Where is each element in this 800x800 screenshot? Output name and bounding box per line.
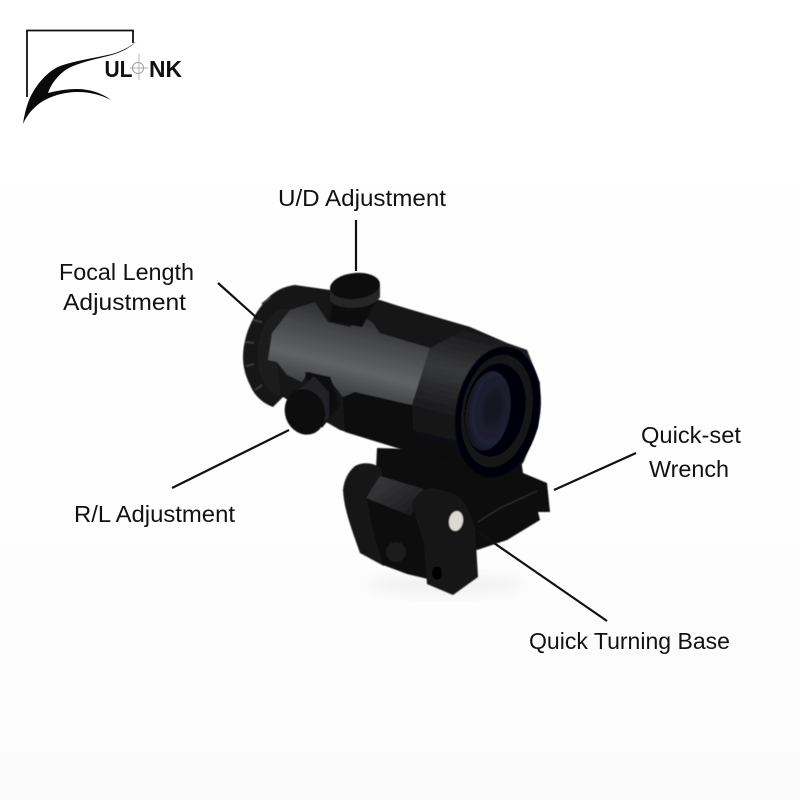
quick turning base: [343, 448, 550, 595]
logo wordmark: NK: [149, 56, 182, 82]
ground shadow: [365, 575, 525, 595]
logo wordmark: [104, 54, 182, 82]
side knob: R/L adjustment: [278, 372, 340, 440]
logo wordmark: UL: [104, 56, 132, 82]
rear ring band: [258, 309, 290, 397]
knob top: [329, 270, 381, 302]
callout: Quick-set Wrench: [554, 422, 742, 490]
logo frame: [27, 30, 133, 97]
callout: Quick-set Wrench: Wrench: [649, 456, 729, 482]
gray body panel: [268, 302, 430, 405]
rail highlight: [478, 491, 537, 522]
inner barrel: [457, 359, 533, 461]
base neck and rail: [375, 448, 550, 550]
scope body: [243, 285, 540, 477]
outer ring: [445, 340, 551, 484]
callout: U/D Adjustment: U/D Adjustment: [278, 185, 447, 211]
locking screw: [386, 542, 406, 562]
top flat facet: [373, 302, 470, 348]
knob side: [330, 284, 380, 308]
knob face: [278, 384, 332, 440]
knob stem: [330, 298, 378, 327]
front barrel: [412, 327, 540, 477]
callout: Focal Length Adjustment: [59, 259, 257, 318]
objective lens: [445, 340, 551, 484]
callout: R/L Adjustment: R/L Adjustment: [74, 501, 236, 527]
top plate: [366, 476, 424, 516]
lower facet: [343, 392, 414, 453]
inner ring: [453, 349, 541, 473]
callout: Focal Length Adjustment: Adjustment: [63, 289, 187, 315]
right block: [412, 488, 478, 595]
callout: Quick Turning Base: Quick Turning Base: [529, 628, 730, 654]
body silhouette: [243, 285, 540, 477]
glass: [459, 368, 517, 454]
callout: Focal Length Adjustment: Focal Length: [59, 259, 194, 285]
callout: R/L Adjustment: [74, 430, 289, 527]
rear ring knurling: [245, 297, 271, 390]
magnet: [447, 510, 465, 532]
left block: [343, 463, 385, 566]
middle lower section: [366, 495, 432, 580]
knob side: [294, 376, 329, 434]
logo: Ulink: [23, 30, 182, 124]
logo swoosh: [23, 41, 137, 124]
callout: Quick-set Wrench: Quick-set: [641, 422, 742, 448]
callout: Quick Turning Base: [478, 532, 730, 654]
screw hole: [432, 566, 442, 580]
knob stem: [305, 372, 340, 428]
product: magnifier scope: [243, 270, 551, 595]
top knob: U/D adjustment: [329, 270, 381, 327]
